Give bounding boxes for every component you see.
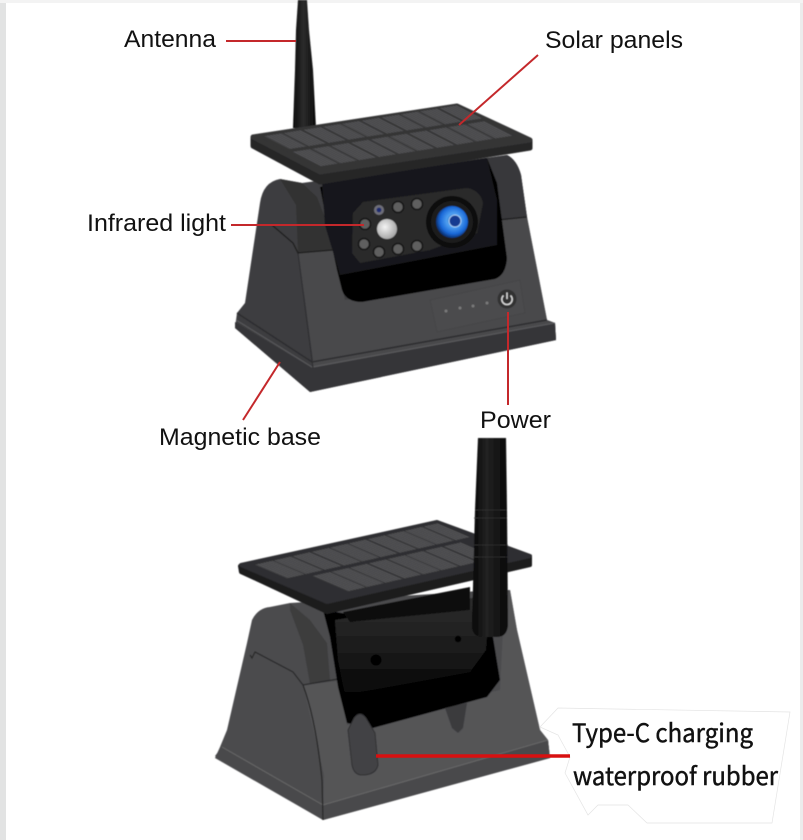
- label: waterproof rubber: waterproof rubber: [573, 757, 778, 793]
- solar cells: [262, 105, 515, 166]
- callout line: antenna: [226, 40, 296, 42]
- label: power: Power: [480, 407, 551, 434]
- light sensor: [374, 205, 384, 215]
- housing front: [303, 590, 550, 820]
- base lip: [215, 740, 550, 820]
- base lip: [235, 322, 556, 392]
- housing seams: [250, 652, 338, 685]
- callout line: solar panels: [459, 55, 538, 125]
- label: antenna: Antenna: [124, 26, 216, 53]
- right margin strip: [800, 0, 803, 840]
- camera recess: [320, 158, 507, 302]
- callout line: magnetic base: [243, 362, 280, 420]
- right arm: [487, 155, 527, 220]
- solar cells: [255, 523, 511, 596]
- camera head: [322, 158, 497, 275]
- label: solar panels: Solar panels: [545, 27, 683, 54]
- housing seams: [272, 217, 527, 253]
- left arm strip: [290, 603, 330, 684]
- callout line: power: [507, 312, 509, 405]
- housing side: [215, 590, 550, 820]
- infrared panel: [352, 188, 483, 263]
- solar panel: [240, 522, 530, 612]
- infrared LEDs: [358, 198, 422, 258]
- motion sensor: [377, 219, 397, 239]
- camera: front view: [235, 0, 556, 392]
- rubber plug: [348, 714, 378, 775]
- housing front: [298, 155, 556, 392]
- label patch: [540, 708, 790, 823]
- left arm: [280, 179, 333, 253]
- label: magnetic base: Magnetic base: [159, 424, 321, 451]
- left margin strip: [0, 0, 6, 840]
- power button: [498, 290, 516, 308]
- callout line: infrared light: [231, 224, 364, 226]
- camera: rear view: [215, 438, 550, 820]
- antenna: [293, 0, 316, 128]
- camera cylinder: [335, 587, 490, 695]
- label: type-c charging: Type-C charging: [572, 714, 753, 750]
- indicator panel: [430, 280, 525, 332]
- wedge in floor: [445, 703, 467, 733]
- label: infrared light: Infrared light: [87, 210, 226, 237]
- camera recess: [323, 610, 500, 728]
- callout line: type-c rubber: [376, 754, 570, 758]
- antenna: [472, 438, 508, 637]
- lens: [426, 196, 478, 248]
- top margin strip: [0, 0, 803, 3]
- housing side: [235, 155, 556, 392]
- solar panel: [253, 105, 530, 182]
